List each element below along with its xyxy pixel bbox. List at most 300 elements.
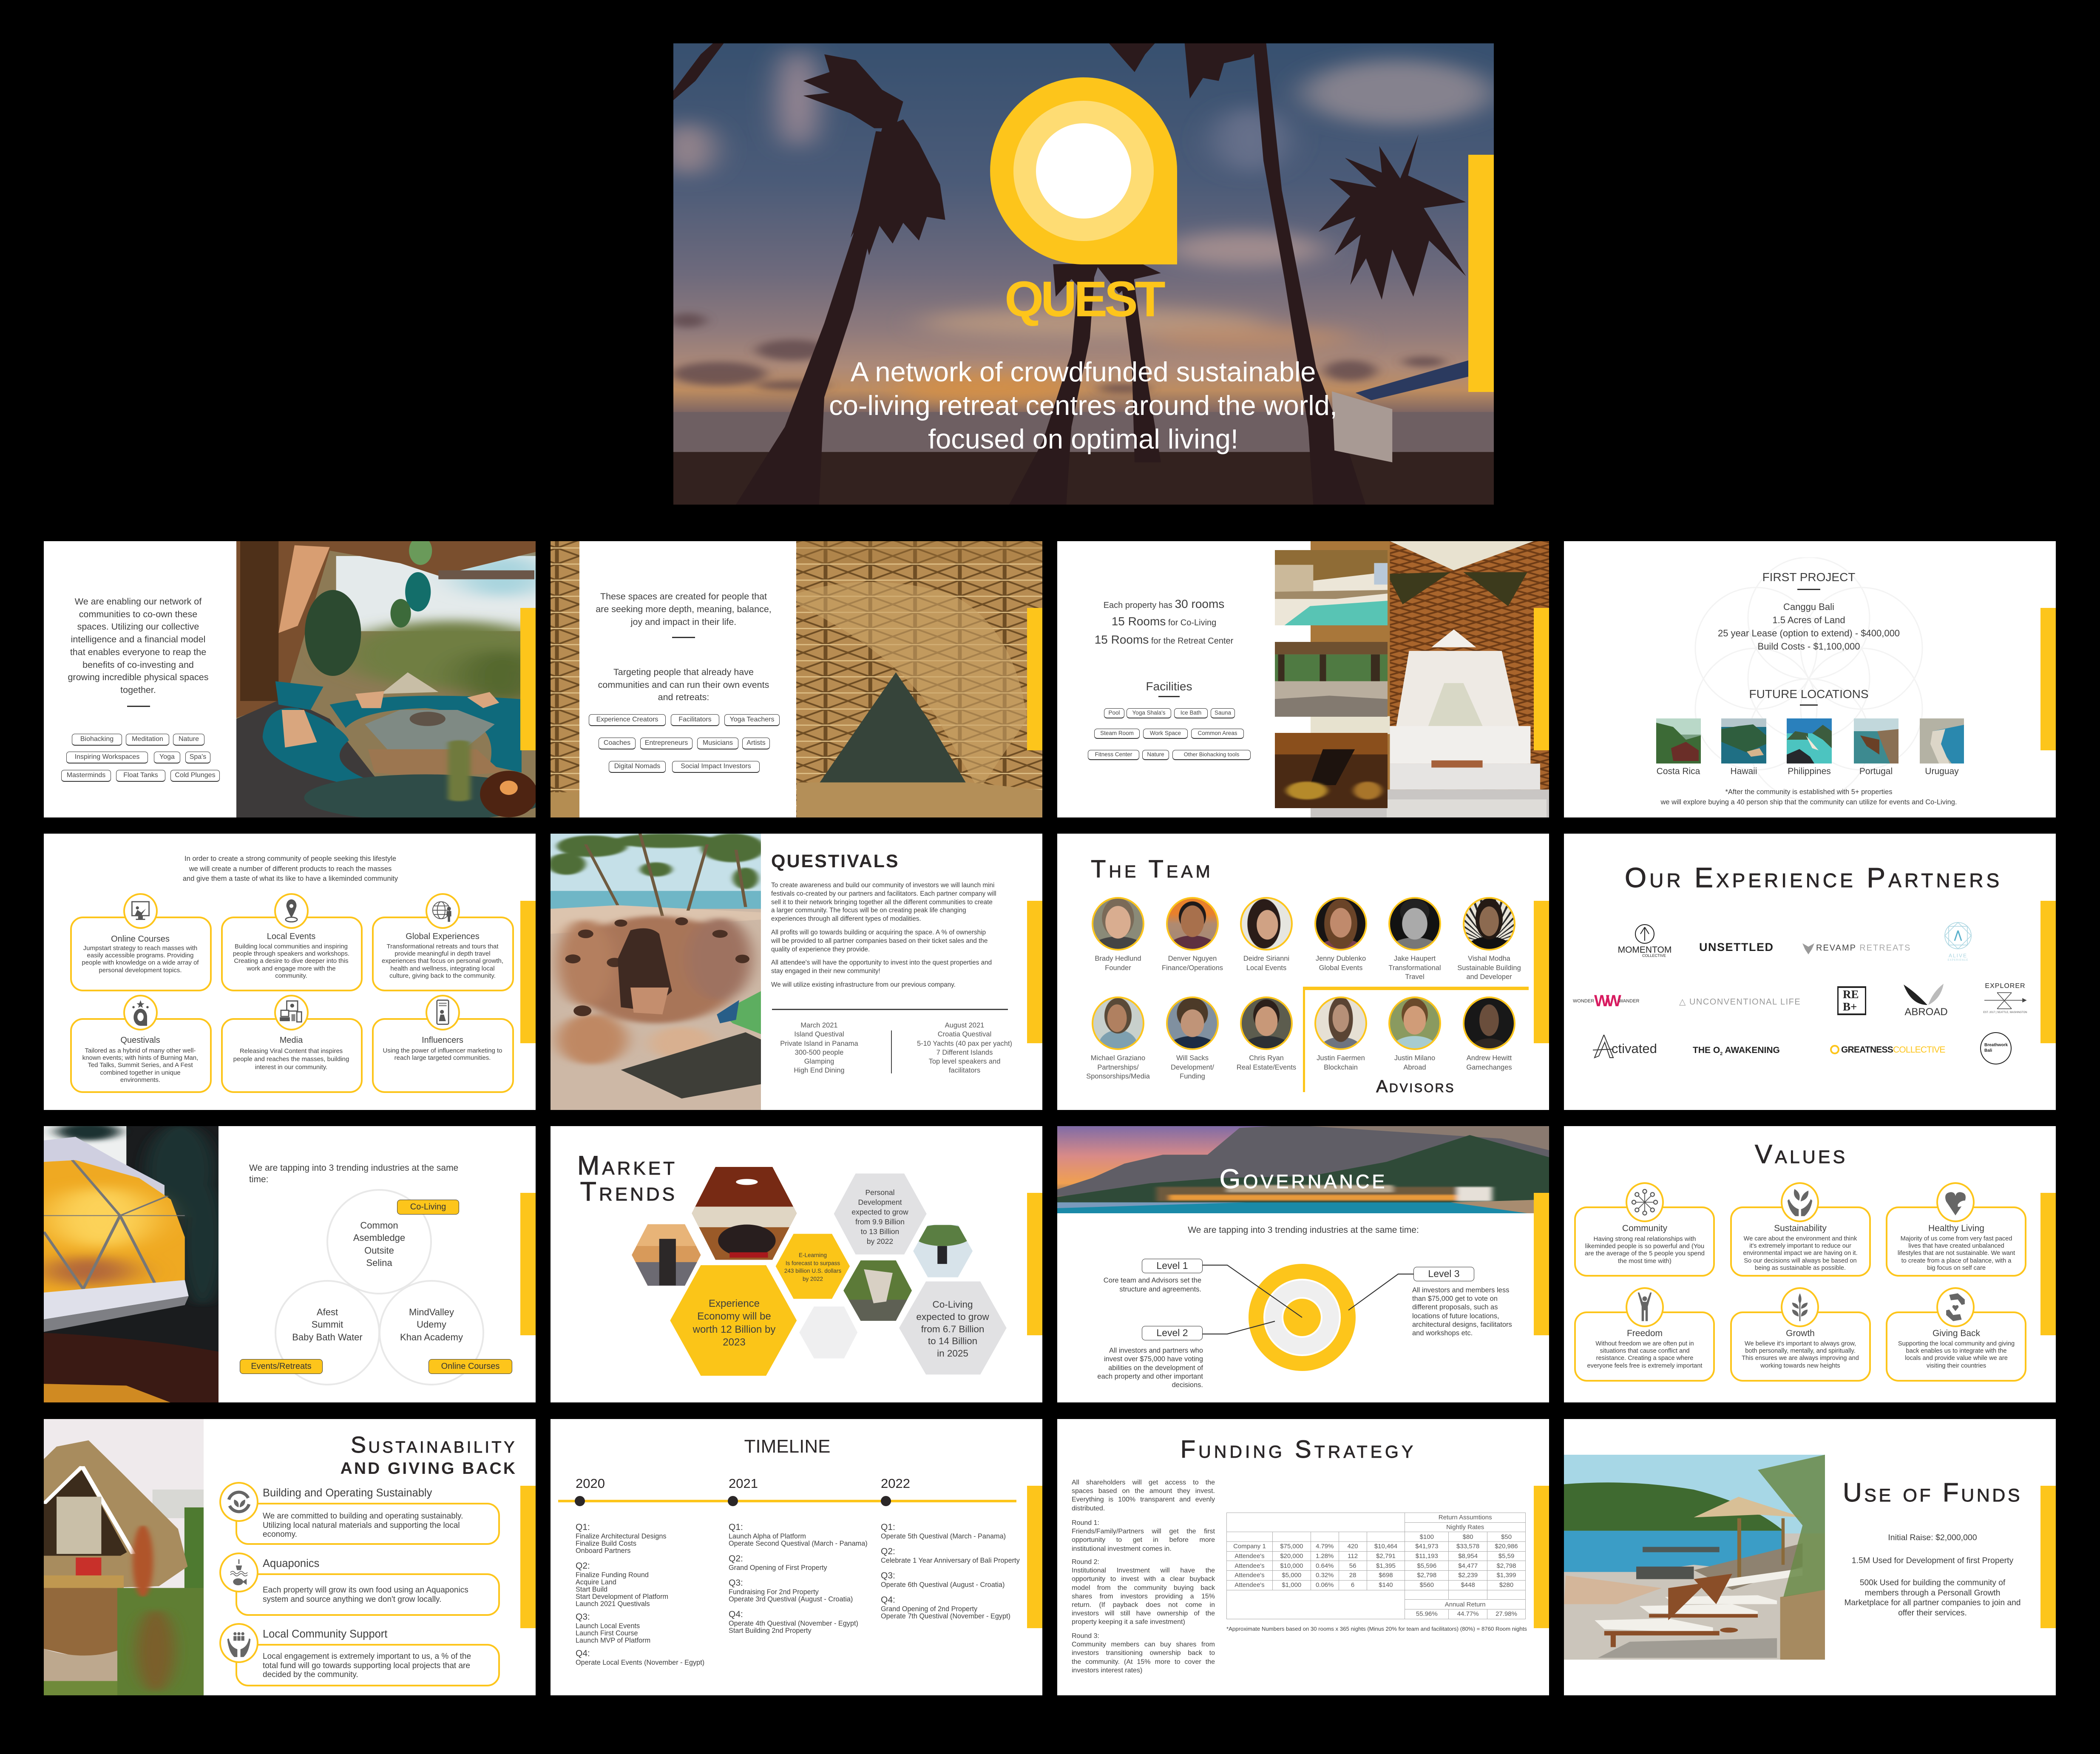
tags: facilities: Steam Room: [1100, 730, 1134, 736]
logo: wonder wander: [1573, 992, 1639, 1010]
heading: advisors: Advisors: [1376, 1076, 1455, 1096]
team names row 1: Denver Nguyen: [1168, 955, 1217, 962]
photo: bamboo arches: [551, 541, 1042, 817]
funds: community: [1845, 1578, 2021, 1618]
card text: [1898, 1235, 2015, 1272]
team names row 1: Global Events: [1319, 964, 1362, 972]
heading: values: Values: [1755, 1140, 1847, 1169]
list: online: [400, 1306, 463, 1343]
flower of life watermark: [1687, 557, 1930, 800]
returns table: $560: [1420, 1581, 1434, 1589]
icon: people in hands: [219, 1623, 258, 1663]
returns table: $5,596: [1417, 1562, 1436, 1570]
hex text: personal development: expected to grow: [851, 1208, 908, 1216]
tags: facilities: Other Biohacking tools: [1184, 751, 1239, 758]
tags: interests: Spa's: [190, 753, 206, 761]
card text: We believe it's important to always grow,: [1745, 1340, 1856, 1347]
card text: [82, 945, 199, 974]
list: co-living: Selina: [366, 1257, 392, 1268]
2022 quarters: Q4:: [881, 1595, 895, 1605]
project details: Canggu Bali: [1783, 602, 1834, 612]
heading: aquaponics: Aquaponics: [263, 1558, 319, 1570]
text: level 1: [1104, 1276, 1201, 1294]
icon: media devices: [274, 995, 309, 1030]
returns table: $50: [1501, 1533, 1512, 1541]
text: level 2: decisions.: [1172, 1381, 1203, 1389]
icon: recycling leaf: [219, 1482, 258, 1522]
2020 quarters: Q2:: [576, 1561, 590, 1571]
heading: first project: FIRST PROJECT: [1762, 570, 1855, 584]
returns table: 0.32%: [1316, 1572, 1334, 1579]
round 2 text: property keeping it a safe investment): [1072, 1618, 1185, 1626]
logo: greatness collective: GREATNESSCOLLECTIVE: [1841, 1045, 1945, 1055]
event: croatia questival: [917, 1021, 1012, 1076]
logo: wonder wander: WONDER: [1573, 999, 1594, 1004]
tags: facilities: Ice Bath: [1181, 710, 1201, 716]
card: influencers: [372, 1018, 514, 1093]
tags: interests: Nature: [179, 735, 199, 743]
intro text: We are tapping into 3 trending industries at the same: [249, 1163, 458, 1173]
card: building: [236, 1503, 500, 1545]
2020 quarters: Operate Local Events (November - Egypt): [576, 1659, 704, 1666]
card text: resistance. Creating a space where: [1596, 1355, 1693, 1362]
returns table: $10,464: [1374, 1543, 1397, 1550]
returns table: $80: [1463, 1533, 1473, 1541]
returns table: $10,000: [1280, 1562, 1303, 1570]
returns table: 27.98%: [1496, 1610, 1517, 1618]
team portraits row 2: [1092, 996, 1515, 1050]
logo: explorer: EXPLORER: [1985, 982, 2026, 990]
tags: audiences: Musicians: [703, 739, 733, 746]
targeting text: communities and can run their own events: [598, 680, 769, 690]
tagline: focused on optimal living!: [928, 423, 1238, 454]
team names row 1: Jake Haupert: [1394, 955, 1436, 962]
returns table: $140: [1379, 1581, 1393, 1589]
shareholder text: spaces based on the amount they invest.: [1072, 1487, 1215, 1495]
tags: interests: Cold Plunges: [175, 772, 216, 779]
paragraphs: festivals co-created by our partners and facilitators. Each partner company will: [771, 890, 996, 897]
card text: people with knowledge on a wide array of: [82, 959, 199, 966]
card text: experiences that focus on personal growth,: [382, 957, 503, 965]
2020 quarters: Finalize Build Costs: [576, 1540, 636, 1547]
logo: REB+: RE: [1843, 988, 1859, 1001]
card: questivals: [70, 1018, 212, 1093]
2020 quarters: Q3:: [576, 1612, 590, 1622]
year 2021: 2021: [729, 1476, 758, 1491]
logo: wonder wander: WW: [1594, 992, 1618, 1010]
tags: interests: Masterminds: [67, 772, 105, 779]
2022 quarters: Q3:: [881, 1571, 895, 1581]
returns table: $20,986: [1495, 1543, 1518, 1550]
card text: reach large targeted communities.: [394, 1054, 491, 1061]
2021 quarters: Q2:: [729, 1554, 743, 1564]
team names row 2: Justin Milano: [1394, 1054, 1435, 1062]
logo: alive: EXPERIENCE: [1948, 959, 1968, 962]
returns table: $280: [1499, 1581, 1513, 1589]
shareholder text: [1072, 1479, 1215, 1513]
paragraphs: To create awareness and build our community of investors we will launch mini: [771, 882, 994, 889]
targeting text: and retreats:: [658, 692, 709, 702]
intro text: We are tapping into 3 trending industries at the same time:: [1188, 1225, 1419, 1235]
panel: governance: [1057, 1126, 1549, 1402]
funds: community: offer their services.: [1898, 1609, 1967, 1618]
hex text: experience economy: worth 12 Billion by: [693, 1324, 775, 1335]
body text: that enables everyone to reap the: [70, 647, 206, 657]
round 2 text: investors will still have ownership of the: [1072, 1610, 1215, 1617]
intro text: we will create a number of different products to reach the masses: [189, 865, 392, 872]
team names row 2: Development/: [1171, 1064, 1214, 1071]
intro text: and give them a taste of what its like to have a likeminded community: [183, 875, 398, 883]
text: level 2: All investors and partners who: [1109, 1347, 1203, 1354]
card text: likeminded people is so powerful and (You: [1585, 1243, 1704, 1250]
card text: lives that have created unbalanced: [1908, 1243, 2004, 1249]
panel: target audience: [551, 541, 1042, 817]
card text: So our decisions will always be based on: [1744, 1257, 1857, 1264]
location: Uruguay: Uruguay: [1925, 766, 1959, 776]
venn circles: [275, 1189, 485, 1385]
logo: abroad: [1903, 984, 1950, 1018]
paragraphs: will be provided to all partner companies based on their ticket sales and the: [771, 937, 988, 945]
logo: momentom: COLLECTIVE: [1642, 954, 1666, 958]
shareholder text: All shareholders will get access to the: [1072, 1479, 1215, 1486]
intro text: In order to create a strong community of people seeking this lifestyle: [184, 855, 396, 863]
year 2022: 2022: [881, 1476, 910, 1491]
returns table: Nightly Rates: [1446, 1524, 1484, 1531]
card title: Growth: [1786, 1328, 1815, 1338]
card: media: [221, 1018, 363, 1093]
logo: activated: ctivated: [1612, 1041, 1657, 1056]
returns table: $2,798: [1417, 1572, 1436, 1579]
card title: Online Courses: [111, 934, 170, 944]
round 2 text: opportunity to invest with a clear buyback: [1072, 1575, 1215, 1583]
card text: [1587, 1340, 1702, 1370]
round 2 text: model from the community buying back: [1072, 1584, 1215, 1592]
tag: events: Events/Retreats: [251, 1362, 312, 1371]
2020 quarters: Finalize Architectural Designs: [576, 1533, 667, 1540]
2021 quarters: Operate 3rd Questival (August - Croatia): [729, 1595, 853, 1603]
round 1 text: institutional investment comes in.: [1072, 1545, 1172, 1552]
paragraphs: quality of experience they provide. All attendee's will have the opportunity to invest into the quest properties and: [771, 946, 992, 966]
event: croatia questival: Croatia Questival: [938, 1030, 991, 1038]
team names row 2: Real Estate/Events: [1237, 1064, 1296, 1071]
tag: level 2: Level 2: [1156, 1327, 1188, 1338]
card text: known events; with hints of Burning Man,: [82, 1054, 198, 1061]
panel: trending industries: [44, 1126, 536, 1402]
returns table: $1,395: [1376, 1562, 1396, 1570]
hex text: e-learning: Is forecast to surpass: [786, 1260, 840, 1266]
card text: both personally, mentally, and spiritually.: [1745, 1348, 1856, 1354]
icon: presenter screen: [123, 893, 158, 929]
tags: interests: Yoga: [159, 753, 175, 761]
intro text: joy and impact in their life.: [631, 617, 736, 627]
card title: Influencers: [422, 1036, 463, 1045]
returns table: $2,239: [1458, 1572, 1478, 1579]
intro text: time:: [249, 1174, 269, 1184]
tags: facilities: Fitness Center: [1095, 751, 1132, 758]
panel: products: [44, 834, 536, 1110]
card text: people and reaches the masses, building: [233, 1056, 349, 1063]
card text: community.: [275, 972, 307, 979]
returns table: 0.06%: [1316, 1581, 1334, 1589]
returns table: Attendee's: [1234, 1572, 1265, 1579]
hex text: e-learning: by 2022: [803, 1275, 823, 1282]
returns table: $5,000: [1282, 1572, 1301, 1579]
card title: Media: [280, 1036, 303, 1045]
list: events: Afest: [317, 1307, 338, 1317]
team names row 1: Deidre Sirianni: [1243, 955, 1289, 962]
tags: facilities: Yoga Shala's: [1132, 710, 1165, 716]
team names row 1: Founder: [1105, 964, 1131, 972]
2020 quarters: Launch First Course: [576, 1629, 638, 1637]
tag: level 3: [1413, 1267, 1474, 1281]
list: online: MindValley: [409, 1307, 454, 1317]
icon: Q with stars: [123, 995, 158, 1030]
card text: [1898, 1340, 2015, 1370]
photo: palm trees at sunset: [673, 43, 1494, 505]
team names row 2: Abroad: [1403, 1064, 1426, 1071]
card text: being as sustainable as possible.: [1755, 1265, 1846, 1272]
heading: the team: The Team: [1091, 855, 1213, 883]
logo: the O2 awakening: THE O2 AWAKENING: [1693, 1045, 1780, 1056]
tags: audiences: Digital Nomads: [614, 763, 660, 770]
body text: communities to co-own these: [79, 609, 197, 619]
card text: situations that cause conflict and: [1600, 1348, 1689, 1354]
photo: pool terrace: [1275, 550, 1388, 625]
text: level 3: different proposals, such as: [1412, 1303, 1498, 1311]
brand logo mark: [990, 77, 1177, 264]
returns table: 0.64%: [1316, 1562, 1334, 1570]
card text: [263, 1512, 463, 1539]
card: growth: [1730, 1311, 1871, 1382]
hex text: personal development: Development: [858, 1198, 902, 1206]
team names row 1: Vishal Modha: [1468, 955, 1510, 962]
card: community: [1574, 1206, 1715, 1277]
text: level 2: each property and other important: [1097, 1373, 1203, 1380]
2020 quarters: Launch Local Events: [576, 1622, 640, 1630]
returns table: 44.77%: [1457, 1610, 1479, 1618]
round 3 text: Round 3:: [1072, 1632, 1099, 1640]
intro text: [596, 590, 772, 628]
team names row 1: Local Events: [1246, 964, 1286, 972]
card text: This ensures we are always improving and: [1742, 1355, 1859, 1362]
card text: [233, 943, 349, 979]
accent bar: [1468, 155, 1494, 392]
list: online: Udemy: [417, 1319, 446, 1330]
returns table: Attendee's: [1234, 1581, 1265, 1589]
card text: [82, 1047, 198, 1084]
paragraphs: stay engaged in their new community! We will utilize existing infrastructure from our previous company.: [771, 968, 956, 988]
hexagon cluster: [632, 1167, 1007, 1376]
returns table: $8,954: [1458, 1552, 1478, 1560]
card title: Community: [1622, 1223, 1667, 1233]
tags: audiences: Artists: [746, 739, 766, 746]
returns table: Attendee's: [1234, 1552, 1265, 1560]
targeting text: [598, 666, 769, 704]
team names row 1: Finance/Operations: [1162, 964, 1223, 972]
panel: communities co-own spaces: [44, 541, 536, 817]
2022 quarters: Operate 7th Questival (November - Egypt): [881, 1612, 1010, 1620]
returns table: $5,59: [1498, 1552, 1514, 1560]
card text: Jumpstart strategy to reach masses with: [83, 945, 197, 952]
round 2 text: shares from investors providing a 15%: [1072, 1593, 1215, 1600]
logo: alive: [1942, 922, 1974, 962]
tag: online courses: Online Courses: [441, 1362, 499, 1371]
heading: and giving back: AND GIVING BACK: [341, 1459, 517, 1478]
heading: timeline: TIMELINE: [744, 1436, 830, 1457]
room counts: 15 Rooms for the Retreat Center: [1095, 633, 1233, 646]
text: level 3: than $75,000 get to vote on: [1412, 1295, 1498, 1303]
logo: REB+: B+: [1843, 1000, 1857, 1013]
card text: easily accessible programs. Providing: [87, 952, 193, 959]
round 1 text: [1072, 1519, 1215, 1553]
event: croatia questival: 5-10 Yachts (40 pax per yacht): [917, 1040, 1012, 1047]
team names row 2: Michael Graziano: [1091, 1054, 1145, 1062]
round 3 text: Community members can buy shares from: [1072, 1641, 1215, 1648]
returns table: $75,000: [1280, 1543, 1303, 1550]
card text: system and source anything we don't grow locally.: [263, 1595, 441, 1604]
icon: aquaponics: [219, 1552, 258, 1592]
heading: market trends: Trends: [580, 1177, 677, 1206]
text: level 1: structure and agreements.: [1119, 1286, 1201, 1293]
event: island questival: Island Questival: [794, 1030, 844, 1038]
intro text: are seeking more depth, meaning, balance,: [596, 604, 772, 614]
team names row 2: Gamechanges: [1466, 1064, 1512, 1071]
project details: [1718, 600, 1900, 653]
tag: co-living: Co-Living: [410, 1202, 446, 1212]
white text column: [579, 541, 796, 817]
card text: total fund will go towards supporting local projects that are: [263, 1661, 470, 1670]
event: island questival: High End Dining: [794, 1067, 845, 1074]
returns table: 420: [1348, 1543, 1358, 1550]
tag: level 3: Level 3: [1428, 1268, 1460, 1279]
logo: wonder wander: WANDER: [1619, 999, 1639, 1004]
hex text: personal development: [851, 1188, 908, 1246]
card text: to create from a place of balance, with a: [1901, 1257, 2011, 1264]
photo: bamboo bedroom: [1311, 541, 1549, 817]
list: co-living: Common: [360, 1220, 398, 1231]
2022 quarters: Operate 5th Questival (March - Panama): [881, 1533, 1006, 1540]
card: global experiences: [372, 917, 514, 991]
list: events: Summit: [312, 1319, 343, 1330]
returns table: $33,578: [1456, 1543, 1479, 1550]
2022 quarters: [881, 1523, 1020, 1620]
panel: questivals: [551, 834, 1042, 1110]
project details: 1.5 Acres of Land: [1772, 615, 1845, 625]
2020 quarters: Start Development of Platform: [576, 1593, 668, 1601]
panel: sustainability and giving back: [44, 1419, 536, 1695]
room counts: 15 Rooms for Co-Living: [1112, 615, 1216, 628]
card text: lifestyles that are not sustainable. We want: [1898, 1250, 2015, 1257]
heading: market trends: Market: [577, 1151, 677, 1181]
heading: future locations: FUTURE LOCATIONS: [1749, 687, 1869, 701]
team names row 1: and Developer: [1466, 973, 1512, 981]
card: online courses: [70, 917, 212, 991]
returns table: 4.79%: [1316, 1543, 1334, 1550]
card text: everyone feels free is extremely important: [1587, 1362, 1702, 1369]
round 3 text: investors interest rates): [1072, 1667, 1142, 1674]
card title: Healthy Living: [1928, 1223, 1984, 1233]
returns table: $11,193: [1416, 1552, 1438, 1560]
photo: glowing geodesic dome: [44, 1126, 219, 1402]
paragraphs: [771, 881, 996, 989]
team names row 2: Chris Ryan: [1249, 1054, 1284, 1062]
funds: community: 500k Used for building the community of: [1860, 1578, 2005, 1587]
hex text: e-learning: [784, 1252, 841, 1283]
list: co-living: Asembledge: [353, 1232, 405, 1243]
intro text: [249, 1163, 458, 1185]
card text: Ted Talks, Summit Series, and A Fest: [88, 1061, 193, 1069]
2022 quarters: Operate 6th Questival (August - Croatia): [881, 1581, 1005, 1589]
returns table: 55.96%: [1416, 1610, 1438, 1618]
2020 quarters: Launch MVP of Platform: [576, 1637, 650, 1644]
hex text: personal development: by 2022: [867, 1237, 893, 1246]
year 2020: [576, 1475, 716, 1666]
returns table: 28: [1349, 1572, 1356, 1579]
2021 quarters: Q1:: [729, 1522, 743, 1532]
body text: intelligence and a financial model: [71, 634, 205, 644]
text: level 3: All investors and members less: [1412, 1286, 1509, 1294]
2021 quarters: Operate Second Questival (March - Panama): [729, 1540, 868, 1547]
title: QUEST: QUEST: [1005, 271, 1163, 327]
round 2 text: return. (If payback does not come in: [1072, 1601, 1215, 1609]
list: events: [292, 1306, 363, 1343]
logo: unsettled: UNSETTLED: [1699, 941, 1774, 954]
2020 quarters: Launch 2021 Questivals: [576, 1600, 650, 1608]
body text: together.: [120, 685, 156, 695]
logo: revamp retreats: REVAMP RETREATS: [1816, 943, 1911, 953]
paragraphs: experiences through all different types of modalities. All profits will go towards building or acquiring the space. A % of ownership: [771, 915, 986, 936]
hex text: personal development: Personal: [865, 1188, 895, 1197]
location: Costa Rica: [1656, 718, 1701, 778]
card text: culture, giving back to the community.: [389, 972, 496, 979]
funds: community: members through a Personall Growth: [1865, 1589, 2000, 1598]
panel: rooms and facilities: [1057, 541, 1549, 817]
card text: back enables us to integrate with the: [1906, 1348, 2006, 1354]
icon: person arms raised: [1626, 1287, 1664, 1327]
returns table: [1226, 1513, 1526, 1619]
team names row 2: Blockchain: [1324, 1064, 1358, 1071]
hex text: co-living: from 6.7 Billion: [921, 1324, 984, 1334]
year 2020: 2020: [576, 1476, 605, 1491]
team names row 2: Funding: [1180, 1073, 1205, 1080]
tags: interests: Float Tanks: [123, 772, 158, 779]
team names row 2: [1083, 1054, 1527, 1082]
tagline: [829, 355, 1337, 456]
body text: growing incredible physical spaces: [68, 672, 209, 682]
returns table: $448: [1461, 1581, 1475, 1589]
tags: facilities: Nature: [1147, 751, 1164, 758]
card title: Local Events: [267, 932, 315, 941]
2020 quarters: Onboard Partners: [576, 1547, 630, 1555]
2021 quarters: Start Building 2nd Property: [729, 1627, 812, 1635]
icon: heart with leaf: [1936, 1182, 1975, 1222]
body text: benefits of co-investing and: [82, 660, 194, 670]
card text: locals and provide value while we are: [1905, 1355, 2008, 1362]
text: level 3: and workshops etc.: [1412, 1329, 1473, 1337]
hex text: co-living: [916, 1299, 989, 1360]
event: island questival: Glamping: [804, 1058, 834, 1065]
panel: use of funds: [1564, 1419, 2056, 1695]
2021 quarters: Operate 4th Questival (November - Egypt): [729, 1620, 858, 1627]
list: co-living: [353, 1219, 405, 1269]
hex text: co-living: expected to grow: [916, 1311, 989, 1322]
location: Uruguay: [1920, 718, 1964, 778]
funds: community: Marketplace for all partner companies to join and: [1845, 1598, 2021, 1607]
2021 quarters: Q3:: [729, 1578, 743, 1588]
tagline: A network of crowdfunded sustainable: [851, 356, 1316, 387]
round 1 text: Round 1:: [1072, 1519, 1099, 1527]
logo: momentom: MOMENTOM: [1618, 945, 1671, 955]
